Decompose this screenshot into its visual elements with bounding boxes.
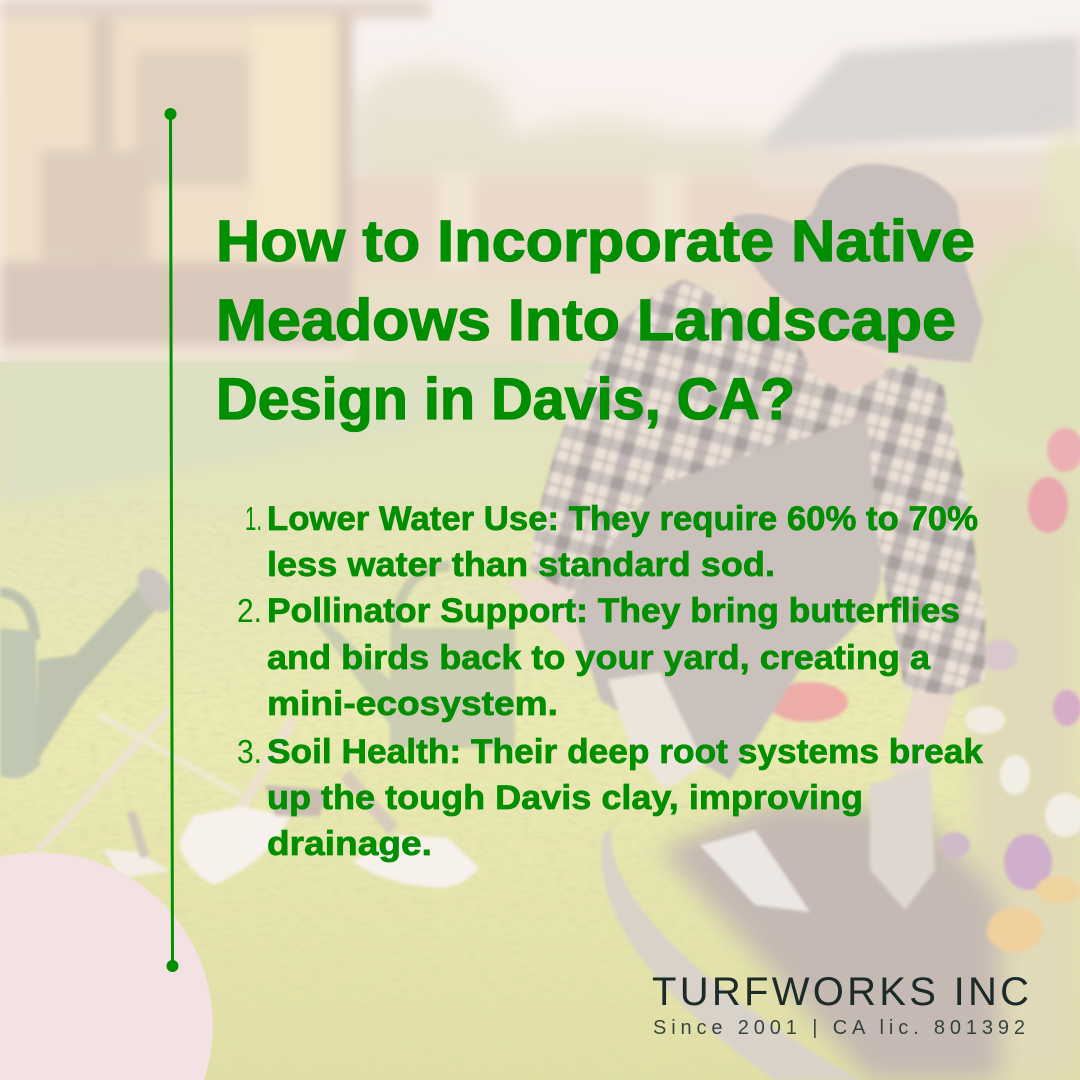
- item 2: pollinator support: [237, 592, 960, 723]
- item 1: lower water use: 1.: [245, 500, 262, 537]
- lawn: [0, 362, 1080, 1080]
- item 3: soil health: [237, 733, 983, 863]
- flowers: [768, 428, 1080, 952]
- sky: [0, 0, 1080, 400]
- company logo: Turfworks Inc: Since 2001 | CA lic. 801392: [653, 1017, 1025, 1039]
- left house: [0, 0, 430, 365]
- item 2: pollinator support: 2.: [237, 592, 262, 629]
- grass texture: [0, 500, 1080, 1080]
- decorative pink circle, bottom left: [0, 852, 213, 1080]
- vertical timeline line with end dots: [164, 108, 178, 972]
- fence: [345, 172, 1080, 368]
- face: [785, 320, 885, 393]
- item 2: pollinator support: and birds back to your yard, creating a: [267, 639, 931, 677]
- garden tools: [38, 710, 479, 888]
- company logo: Turfworks Inc: [652, 970, 1029, 1039]
- title: Design in Davis, CA?: [216, 367, 795, 432]
- item 3: soil health: Soil Health: Their deep root systems break: [267, 733, 983, 771]
- gloves: [608, 672, 705, 790]
- title: Meadows Into Landscape: [216, 288, 956, 353]
- item 3: soil health: 3.: [237, 733, 262, 770]
- company logo: Turfworks Inc: TURFWORKS INC: [652, 970, 1029, 1014]
- title: [216, 209, 975, 432]
- apron: [570, 417, 881, 780]
- numbered list of meadow benefits: [237, 500, 983, 863]
- item 3: soil health: drainage.: [267, 825, 432, 863]
- shirt in plaid: [530, 279, 985, 695]
- item 2: pollinator support: Pollinator Support: They bring butterflies: [267, 592, 960, 630]
- watering can left: [0, 562, 180, 778]
- second watering can: [314, 566, 515, 748]
- gardener: [505, 164, 985, 912]
- item 1: lower water use: less water than standard sod.: [267, 546, 775, 584]
- item 2: pollinator support: mini-ecosystem.: [267, 685, 558, 723]
- title: How to Incorporate Native: [216, 209, 975, 274]
- forearms: [505, 580, 660, 700]
- garden bed edging: [601, 825, 860, 1080]
- right shrubs and garden bed: [660, 130, 1080, 1080]
- hand trowel: [700, 830, 810, 912]
- distant trees: [350, 65, 770, 195]
- item 1: lower water use: [245, 500, 978, 584]
- right house: [755, 35, 1080, 190]
- item 1: lower water use: Lower Water Use: They require 60% to 70%: [267, 500, 978, 538]
- item 3: soil health: up the tough Davis clay, improving: [267, 779, 863, 817]
- hat: [733, 164, 983, 362]
